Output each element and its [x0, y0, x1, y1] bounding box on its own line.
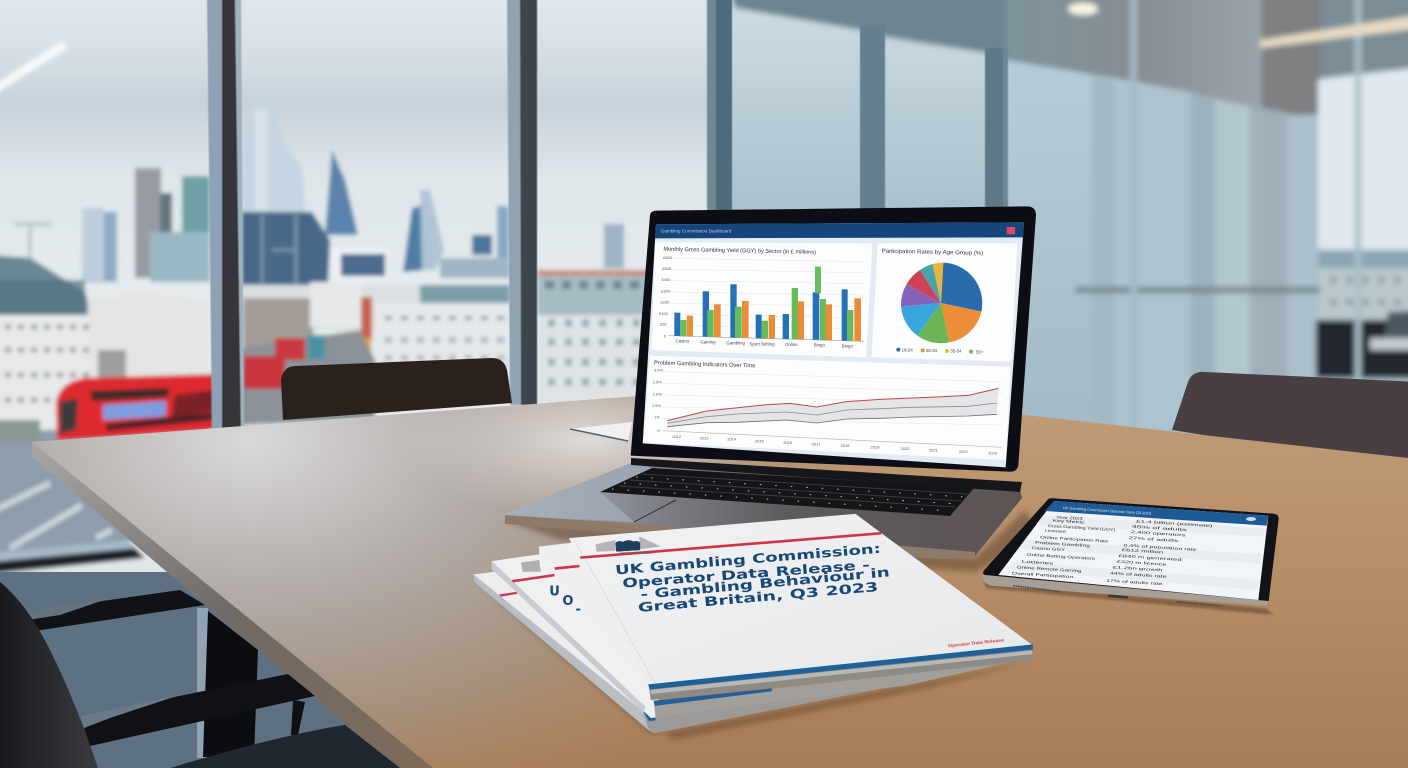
tablet table left column: Online Betting Operators: [1027, 553, 1095, 561]
laptop base: [505, 463, 1022, 556]
red rule: [580, 532, 882, 559]
booklet 4 (bottom): [474, 569, 906, 733]
tablet table right column: £320 m licence: [1117, 560, 1167, 567]
trackpad seam: [634, 500, 676, 522]
chair lower arm: [80, 674, 315, 746]
pie legend: [896, 347, 984, 354]
panel: problem gambling line chart: 2013: [700, 435, 709, 440]
pie legend: 55+: [976, 349, 984, 354]
panel: problem gambling line chart: 2020: [901, 446, 910, 451]
chair upper arm: [25, 590, 205, 631]
blue spine stripe: [648, 644, 1033, 689]
tablet table left column: Lotteries: [1022, 560, 1054, 566]
tablet, drawn in zoom units: [983, 498, 1279, 615]
red double-decker bus: [56, 374, 215, 440]
glass bar: [1075, 287, 1320, 293]
panel: problem gambling line chart: 2.0%: [653, 391, 662, 396]
tablet bezel: [983, 498, 1279, 601]
booklet 3: -: [575, 602, 581, 617]
report title: - Gambling Behaviour in: [640, 564, 890, 602]
stack shadow: [475, 582, 1030, 740]
panel: monthly GGY bar chart: Gambling: [726, 340, 746, 345]
wall panels: [1092, 75, 1262, 430]
tablet table left column: Problem Gambling: [1035, 541, 1090, 548]
pie: [901, 263, 982, 343]
panel: problem gambling line chart: 2012: [672, 434, 682, 439]
ceiling lights: [1068, 3, 1408, 48]
chair seat: [170, 725, 400, 768]
chair back: [0, 578, 98, 768]
cover edge: [649, 645, 1033, 700]
tablet header: [1045, 501, 1268, 526]
tablet table left column: Online Remote Gaming: [1017, 565, 1082, 573]
laptop screen, drawn in 3x zoom units: [631, 206, 1036, 472]
panel: problem gambling line chart: 2018: [841, 443, 850, 448]
panel: problem gambling line chart: 0: [657, 428, 660, 433]
table row stripes: [1007, 516, 1266, 590]
concrete column: [1262, 0, 1320, 430]
bars: green: [680, 267, 853, 341]
tablet table right column: £840 m generated: [1118, 554, 1182, 562]
panel: monthly GGY bar chart: £100: [659, 311, 669, 316]
booklet 3: [492, 553, 659, 718]
panel: problem gambling line chart: 2.5%: [653, 379, 662, 384]
panel: monthly GGY bar chart: £400: [661, 277, 671, 282]
booklet 1 (top): [569, 514, 1033, 700]
panel: problem gambling line chart: 2016: [783, 440, 793, 445]
right window with building: [1316, 0, 1408, 378]
tablet display: [998, 501, 1268, 600]
panel: problem gambling line chart: Problem Gambling Indicators Over Time: [654, 360, 755, 370]
left city building: [0, 255, 208, 435]
report title: Operator Data Release -: [622, 557, 870, 591]
chair: far centre: [281, 358, 512, 420]
panel: monthly GGY bar chart: £300: [661, 288, 671, 293]
panel: problem gambling line chart: 1%: [654, 415, 660, 420]
pie legend: 18-24: [902, 347, 913, 352]
mid-distance buildings: [241, 270, 709, 425]
tablet table left column: [1012, 515, 1116, 579]
pie legend: 35-54: [950, 349, 962, 354]
bars: orange: [687, 298, 861, 341]
tablet table left column: Year 2023: [1056, 515, 1083, 521]
pie legend: 25-34: [926, 348, 938, 353]
tablet table right column: £612 million: [1122, 548, 1163, 555]
chair: far right: [1172, 372, 1408, 470]
keyboard: [600, 468, 974, 516]
display header bar: Gambling Commission Dashboard: [661, 229, 732, 234]
panel: monthly GGY bar chart: 0: [664, 334, 667, 339]
panel: monthly GGY bar chart: Casino: [676, 339, 690, 344]
panel: monthly GGY bar chart: Monthly Gross Gambling Yield (GGY) by Sector (in £ millions): [663, 247, 816, 256]
panel: monthly GGY bar chart: Online: [785, 342, 798, 347]
panel: participation pie chart: [872, 243, 1017, 362]
booklet stack, drawn in zoom units: [474, 514, 1033, 740]
ceiling above far windows: [728, 0, 1010, 60]
tablet table right column: £1.2bn growth: [1113, 565, 1163, 572]
red trend line: [667, 388, 998, 421]
skyline towers, centre window: [241, 100, 624, 285]
panel: problem gambling line chart: 2019: [871, 445, 880, 450]
bars: blue: [674, 284, 848, 341]
booklet 3: O: [562, 594, 573, 609]
booklet 2: [539, 542, 1006, 717]
tablet shadow: [983, 582, 1273, 615]
tablet table left column: Key Metric: [1053, 519, 1085, 525]
report title: Great Britain, Q3 2023: [637, 579, 879, 615]
report title: [614, 541, 890, 615]
hinge: [631, 458, 1022, 492]
window view: city skyline: [0, 0, 750, 580]
tablet metal edge: [983, 575, 1268, 606]
tablet table right column: 27% of adults: [1128, 536, 1179, 543]
tablet table right column: 44% of adults rate: [1110, 571, 1167, 579]
table leg: [203, 611, 258, 757]
floor: [0, 572, 440, 768]
bezel: [631, 206, 1036, 472]
tablet table right column: 17% of adults rate: [1106, 579, 1163, 586]
panel: problem gambling line chart: 2017: [812, 442, 821, 447]
sheet on table: [570, 422, 632, 441]
panel: monthly GGY bar chart: Bingo: [842, 344, 853, 349]
ceiling over glass room: [1005, 0, 1265, 112]
panel: monthly GGY bar chart: £600: [663, 255, 673, 260]
crest logo: [595, 536, 661, 555]
panel: monthly GGY bar chart: Sport Betting: [749, 341, 775, 346]
display background: [643, 222, 1024, 467]
booklet 3: U: [549, 584, 560, 599]
laptop shadow: [505, 510, 1040, 572]
panel: problem gambling line chart: 2014: [727, 437, 737, 442]
tablet header: UK Gambling Commission Operator Data Q3 2023: [1063, 506, 1151, 516]
panel: participation pie chart: Participation Rates by Age Group (%): [882, 249, 984, 257]
window pillars: [207, 0, 1008, 430]
tablet table right column: £1.4 billion (estimate): [1136, 519, 1214, 528]
panel: monthly GGY bar chart: £200: [660, 300, 670, 305]
foreground office chair and table leg: [0, 578, 400, 768]
panel: problem gambling line chart: 2015: [755, 438, 765, 443]
tablet table left column: Casino GGY: [1032, 546, 1066, 552]
panel: monthly GGY bar chart: £500: [662, 266, 672, 271]
tablet table left column: Overall Participation: [1012, 571, 1073, 579]
panel: monthly GGY bar chart: [652, 242, 872, 357]
panel: monthly GGY bar chart: Gaming: [700, 340, 716, 345]
panel: monthly GGY bar chart: £50: [660, 322, 667, 327]
panel: problem gambling line chart: 2022: [959, 449, 969, 454]
crest logo: Gambling Commission: [619, 551, 652, 555]
street and traffic: [0, 420, 210, 574]
panel: problem gambling line chart: 1.5%: [652, 403, 662, 408]
tablet table left column: Gross Gambling Yield (GGY): [1048, 524, 1116, 532]
panel: monthly GGY bar chart: Bingo: [814, 343, 825, 348]
skyline towers, left window: [14, 168, 210, 283]
laptop: [505, 206, 1040, 572]
tablet table right column: [1106, 519, 1214, 586]
tablet table right column: 45% of adults: [1132, 525, 1187, 532]
tablet table right column: 0.4% of population rate: [1123, 543, 1197, 552]
cover face: [569, 514, 1033, 685]
tablet table right column: 2,400 operators: [1131, 530, 1186, 537]
far windows and glass wall: [728, 0, 1408, 440]
red footer note: Operator Data Release: [948, 637, 1005, 648]
tablet table left column: Online Participation Rate: [1040, 535, 1108, 544]
panel: problem gambling line chart: 2021: [929, 447, 939, 452]
report title: UK Gambling Commission:: [614, 541, 881, 578]
panel: problem gambling line chart: 3.0%: [654, 368, 664, 373]
tablet table left column: Licensed: [1045, 529, 1066, 534]
panel: problem gambling line chart: [643, 356, 1011, 460]
table top: [0, 380, 1408, 768]
pale post: [197, 608, 208, 758]
panel: problem gambling line chart: 2023: [988, 451, 998, 456]
shaded band: [667, 388, 998, 427]
display header bar: [655, 222, 1024, 238]
